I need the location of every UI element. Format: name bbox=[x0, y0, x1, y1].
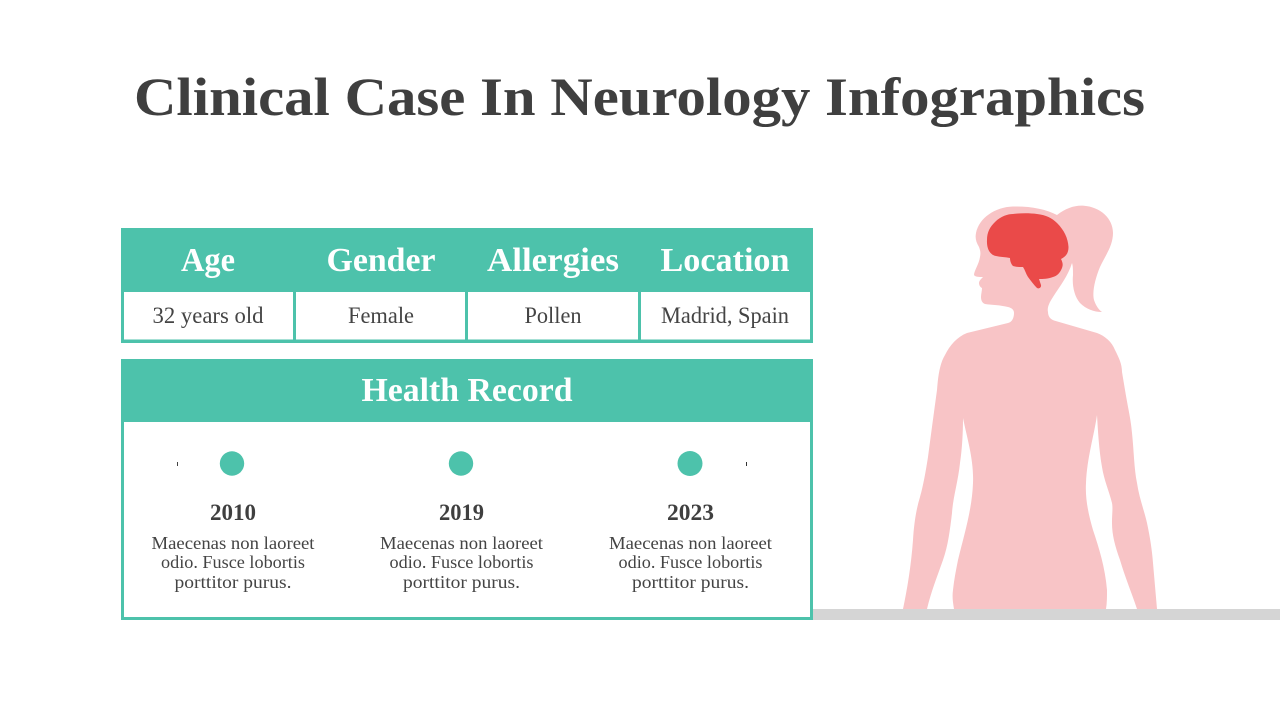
panel body bbox=[124, 422, 810, 617]
dot 2023 bbox=[678, 451, 702, 476]
description 2023: porttitor purus. bbox=[632, 572, 749, 592]
panel frame and header bbox=[121, 359, 813, 620]
year 2019: 2019 bbox=[439, 500, 484, 526]
title: Clinical Case In Neurology Infographics bbox=[134, 67, 1145, 127]
cell: location bbox=[641, 292, 810, 340]
cell: allergies bbox=[468, 292, 638, 340]
description 2010: odio. Fusce lobortis bbox=[161, 552, 305, 572]
header: age: Age bbox=[181, 242, 235, 279]
cell: age bbox=[124, 292, 293, 340]
timeline tick right bbox=[746, 462, 747, 466]
header: allergies: Allergies bbox=[487, 242, 619, 279]
silhouette bbox=[903, 206, 1157, 609]
header: location: Location bbox=[660, 242, 790, 279]
description 2019: Maecenas non laoreet bbox=[380, 533, 543, 553]
header: gender: Gender bbox=[326, 242, 436, 279]
description 2010: Maecenas non laoreet bbox=[152, 533, 314, 553]
entry: 2023 bbox=[609, 451, 772, 592]
dot 2019 bbox=[449, 451, 473, 476]
description 2023: odio. Fusce lobortis bbox=[618, 552, 762, 572]
cell: gender bbox=[296, 292, 465, 340]
value: gender: Female bbox=[348, 303, 414, 329]
description 2023: Maecenas non laoreet bbox=[609, 533, 772, 553]
brain bbox=[987, 213, 1068, 288]
entry: 2010 bbox=[152, 451, 314, 592]
timeline tick left bbox=[177, 462, 178, 466]
dot 2010 bbox=[220, 451, 244, 476]
description 2019 bbox=[380, 533, 543, 592]
figure: woman silhouette with brain bbox=[903, 206, 1157, 609]
description 2010 bbox=[152, 533, 314, 592]
value: age: 32 years old bbox=[152, 303, 264, 329]
description 2019: odio. Fusce lobortis bbox=[390, 552, 534, 572]
panel: patient info table bbox=[121, 228, 813, 343]
value: location: Madrid, Spain bbox=[661, 303, 789, 329]
description 2019: porttitor purus. bbox=[403, 572, 520, 592]
entry: 2019 bbox=[380, 451, 543, 592]
value: allergies: Pollen bbox=[524, 303, 582, 329]
year 2010: 2010 bbox=[210, 500, 256, 526]
floor bar bbox=[813, 609, 1280, 620]
description 2023 bbox=[609, 533, 772, 592]
table outline and header bbox=[121, 228, 813, 343]
panel: health record bbox=[121, 359, 813, 620]
heading: Health Record bbox=[362, 372, 573, 409]
description 2010: porttitor purus. bbox=[174, 572, 292, 592]
year 2023: 2023 bbox=[667, 500, 714, 526]
